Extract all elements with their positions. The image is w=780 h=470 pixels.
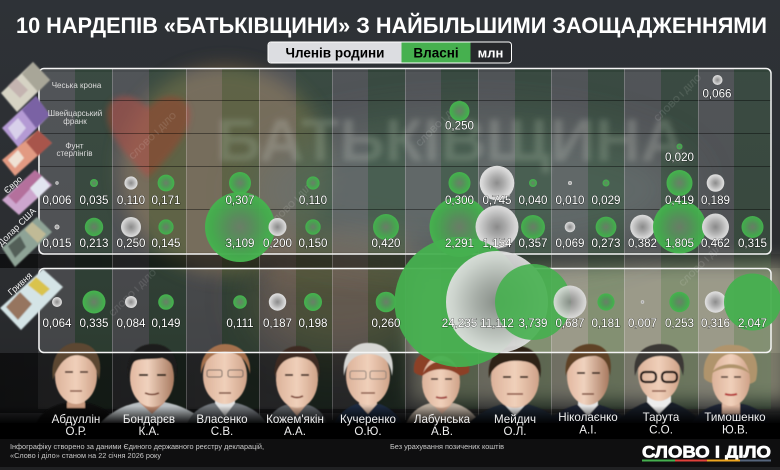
names: А.А. xyxy=(284,425,306,438)
portrait: Кожем'якін xyxy=(267,346,327,424)
footer note: loans: Без урахування позичених коштів xyxy=(390,443,504,451)
values: euro: 0,307 xyxy=(225,194,255,207)
values: US dollar: 0,382 xyxy=(628,237,657,250)
values: euro: 0,745 xyxy=(482,194,512,207)
values: pound sterling: 0,020 xyxy=(665,151,694,164)
banknote: US dollar xyxy=(2,217,52,267)
names xyxy=(52,411,766,438)
values: hryvnia: 0,084 xyxy=(116,317,146,330)
currency row labels xyxy=(48,81,102,158)
values: hryvnia: 0,187 xyxy=(263,317,292,330)
values: euro xyxy=(42,194,730,207)
names: Кучеренко xyxy=(340,413,396,426)
portrait: Ніколаєнко xyxy=(546,344,630,424)
names: О.Р. xyxy=(65,425,87,438)
portrait: Мейдич xyxy=(467,346,563,424)
watermarks: СЛОВО І ДІЛО xyxy=(267,177,319,229)
names: О.Ю. xyxy=(354,425,382,438)
portrait: Лабунська xyxy=(406,351,480,424)
bubbles: US dollar xyxy=(54,192,764,262)
values: hryvnia: 0,260 xyxy=(371,317,401,330)
values: euro: 0,006 xyxy=(42,194,72,207)
footer source note: Інфографіку створено за даними Єдиного державного реєстру декларацій, xyxy=(10,443,264,451)
names: Мейдич xyxy=(494,413,536,426)
values: Czech koruna: 0,066 xyxy=(702,88,732,100)
values: euro: 0,171 xyxy=(151,194,181,207)
values: US dollar: 0,273 xyxy=(591,237,621,250)
values: hryvnia: 11,112 xyxy=(480,317,514,330)
banknote: euro xyxy=(2,170,52,215)
names: А.В. xyxy=(431,425,453,438)
values: Swiss franc: 0,250 xyxy=(445,120,474,132)
banknote: pound sterling xyxy=(2,130,52,176)
portrait: Власенко xyxy=(187,344,267,424)
bubbles: Swiss franc xyxy=(450,101,470,121)
portrait: Кучеренко xyxy=(334,343,402,424)
bubbles: euro xyxy=(55,166,724,200)
footer band xyxy=(0,439,780,467)
currency row labels: Чеська крона xyxy=(52,81,102,90)
portrait: Абдуллін xyxy=(36,343,116,424)
portrait: Тимошенко xyxy=(691,345,771,424)
panel frame: hryvnia xyxy=(39,268,771,352)
values: US dollar: 0,250 xyxy=(116,237,146,250)
banknote: Czech koruna xyxy=(1,62,50,112)
bubbles: Czech koruna xyxy=(712,75,722,85)
values: US dollar: 1,154 xyxy=(482,237,512,250)
values: US dollar: 0,200 xyxy=(263,237,292,250)
banknote: Swiss franc xyxy=(2,96,50,147)
watermarks: СЛОВО І ДІЛО xyxy=(652,72,704,124)
values: hryvnia: 0,007 xyxy=(628,317,657,330)
values: hryvnia: 0,335 xyxy=(79,317,109,330)
legend: Членів родини xyxy=(286,46,384,60)
values: euro: 0,035 xyxy=(79,194,109,207)
watermarks xyxy=(107,72,729,319)
values: US dollar: 0,015 xyxy=(42,237,72,250)
footer source note xyxy=(10,443,264,460)
values: hryvnia: 2,047 xyxy=(738,317,767,330)
legend xyxy=(268,42,512,63)
names: Абдуллін xyxy=(52,413,100,426)
currency labels on notes: Гривня xyxy=(6,270,34,297)
values: US dollar: 3,109 xyxy=(225,237,255,250)
values: euro: 0,029 xyxy=(591,194,621,207)
names: Лабунська xyxy=(414,413,471,426)
legend: Власні xyxy=(413,46,459,60)
footer source note: «Слово і діло» станом на 22 січня 2026 року xyxy=(10,452,162,460)
panel frame: foreign currency xyxy=(39,68,771,254)
names: А.І. xyxy=(579,424,597,436)
values: US dollar xyxy=(42,237,767,250)
names: С.О. xyxy=(649,424,673,436)
watermarks: СЛОВО І ДІЛО xyxy=(414,97,466,149)
values: hryvnia: 0,687 xyxy=(555,317,585,330)
names: Тарута xyxy=(643,411,680,424)
values: euro: 0,010 xyxy=(555,194,585,207)
values: hryvnia: 0,198 xyxy=(298,317,328,330)
values: hryvnia: 0,064 xyxy=(42,317,72,330)
portrait: Тарута xyxy=(615,344,703,424)
values: euro: 0,300 xyxy=(445,194,474,207)
names: Кожем'якін xyxy=(266,413,324,426)
names: Бондарєв xyxy=(123,413,175,426)
values: euro: 0,419 xyxy=(665,194,694,207)
column stripes xyxy=(0,69,780,420)
values: hryvnia: 3,739 xyxy=(518,317,548,330)
values: US dollar: 0,069 xyxy=(555,237,585,250)
watermarks: СЛОВО І ДІЛО xyxy=(107,267,159,319)
values: US dollar: 0,462 xyxy=(701,237,730,250)
names: Ю.В. xyxy=(722,424,748,436)
bubbles: hryvnia xyxy=(52,237,780,367)
watermarks: СЛОВО І ДІЛО xyxy=(127,110,179,162)
names: Ніколаєнко xyxy=(558,411,618,424)
values: hryvnia: 24,235 xyxy=(442,317,477,330)
currency row labels: Швейцарський xyxy=(48,109,102,118)
names: Тимошенко xyxy=(704,411,766,424)
values: US dollar: 0,150 xyxy=(298,237,328,250)
currency labels on notes xyxy=(0,174,38,297)
values: euro: 0,189 xyxy=(701,194,730,207)
currency row labels: франк xyxy=(63,117,87,126)
values: US dollar: 0,315 xyxy=(738,237,767,250)
currency labels on notes: Євро xyxy=(2,174,24,196)
values: hryvnia: 0,111 xyxy=(226,317,254,330)
values: euro: 0,040 xyxy=(518,194,548,207)
legend: млн xyxy=(478,46,503,60)
values: hryvnia: 0,253 xyxy=(665,317,694,330)
title: 10 НАРДЕПІВ «БАТЬКІВЩИНИ» З НАЙБІЛЬШИМИ ЗАОЩАДЖЕННЯМИ xyxy=(16,13,767,38)
values: US dollar: 1,805 xyxy=(665,237,694,250)
watermarks: СЛОВО І ДІЛО xyxy=(677,237,729,289)
values: hryvnia xyxy=(42,317,767,330)
values: US dollar: 0,420 xyxy=(371,237,401,250)
bottom fade band xyxy=(0,406,780,424)
background photo: БАТЬКІВЩИНА xyxy=(216,107,686,174)
values: euro: 0,110 xyxy=(117,194,145,207)
banknotes xyxy=(0,62,63,330)
currency row labels: Фунт xyxy=(65,142,84,150)
values: US dollar: 0,213 xyxy=(79,237,109,250)
values: US dollar: 0,145 xyxy=(151,237,181,250)
currency row labels: стерлінгів xyxy=(56,149,93,158)
values: hryvnia: 0,316 xyxy=(701,317,730,330)
bubbles: pound sterling xyxy=(676,144,682,150)
names: Власенко xyxy=(196,413,248,426)
values: US dollar: 2,291 xyxy=(445,237,474,250)
names band xyxy=(0,423,780,439)
portrait: Бондарєв xyxy=(100,344,208,424)
banknote: hryvnia xyxy=(0,269,63,330)
names: К.А. xyxy=(139,425,159,438)
values: euro: 0,110 xyxy=(299,194,327,207)
names: С.В. xyxy=(211,425,233,438)
logo: СЛОВО І ДІЛО xyxy=(642,442,771,462)
portraits row xyxy=(36,343,771,424)
values: hryvnia: 0,149 xyxy=(151,317,181,330)
names: О.Л. xyxy=(503,425,527,438)
values: hryvnia: 0,181 xyxy=(591,317,621,330)
values: US dollar: 0,357 xyxy=(518,237,548,250)
